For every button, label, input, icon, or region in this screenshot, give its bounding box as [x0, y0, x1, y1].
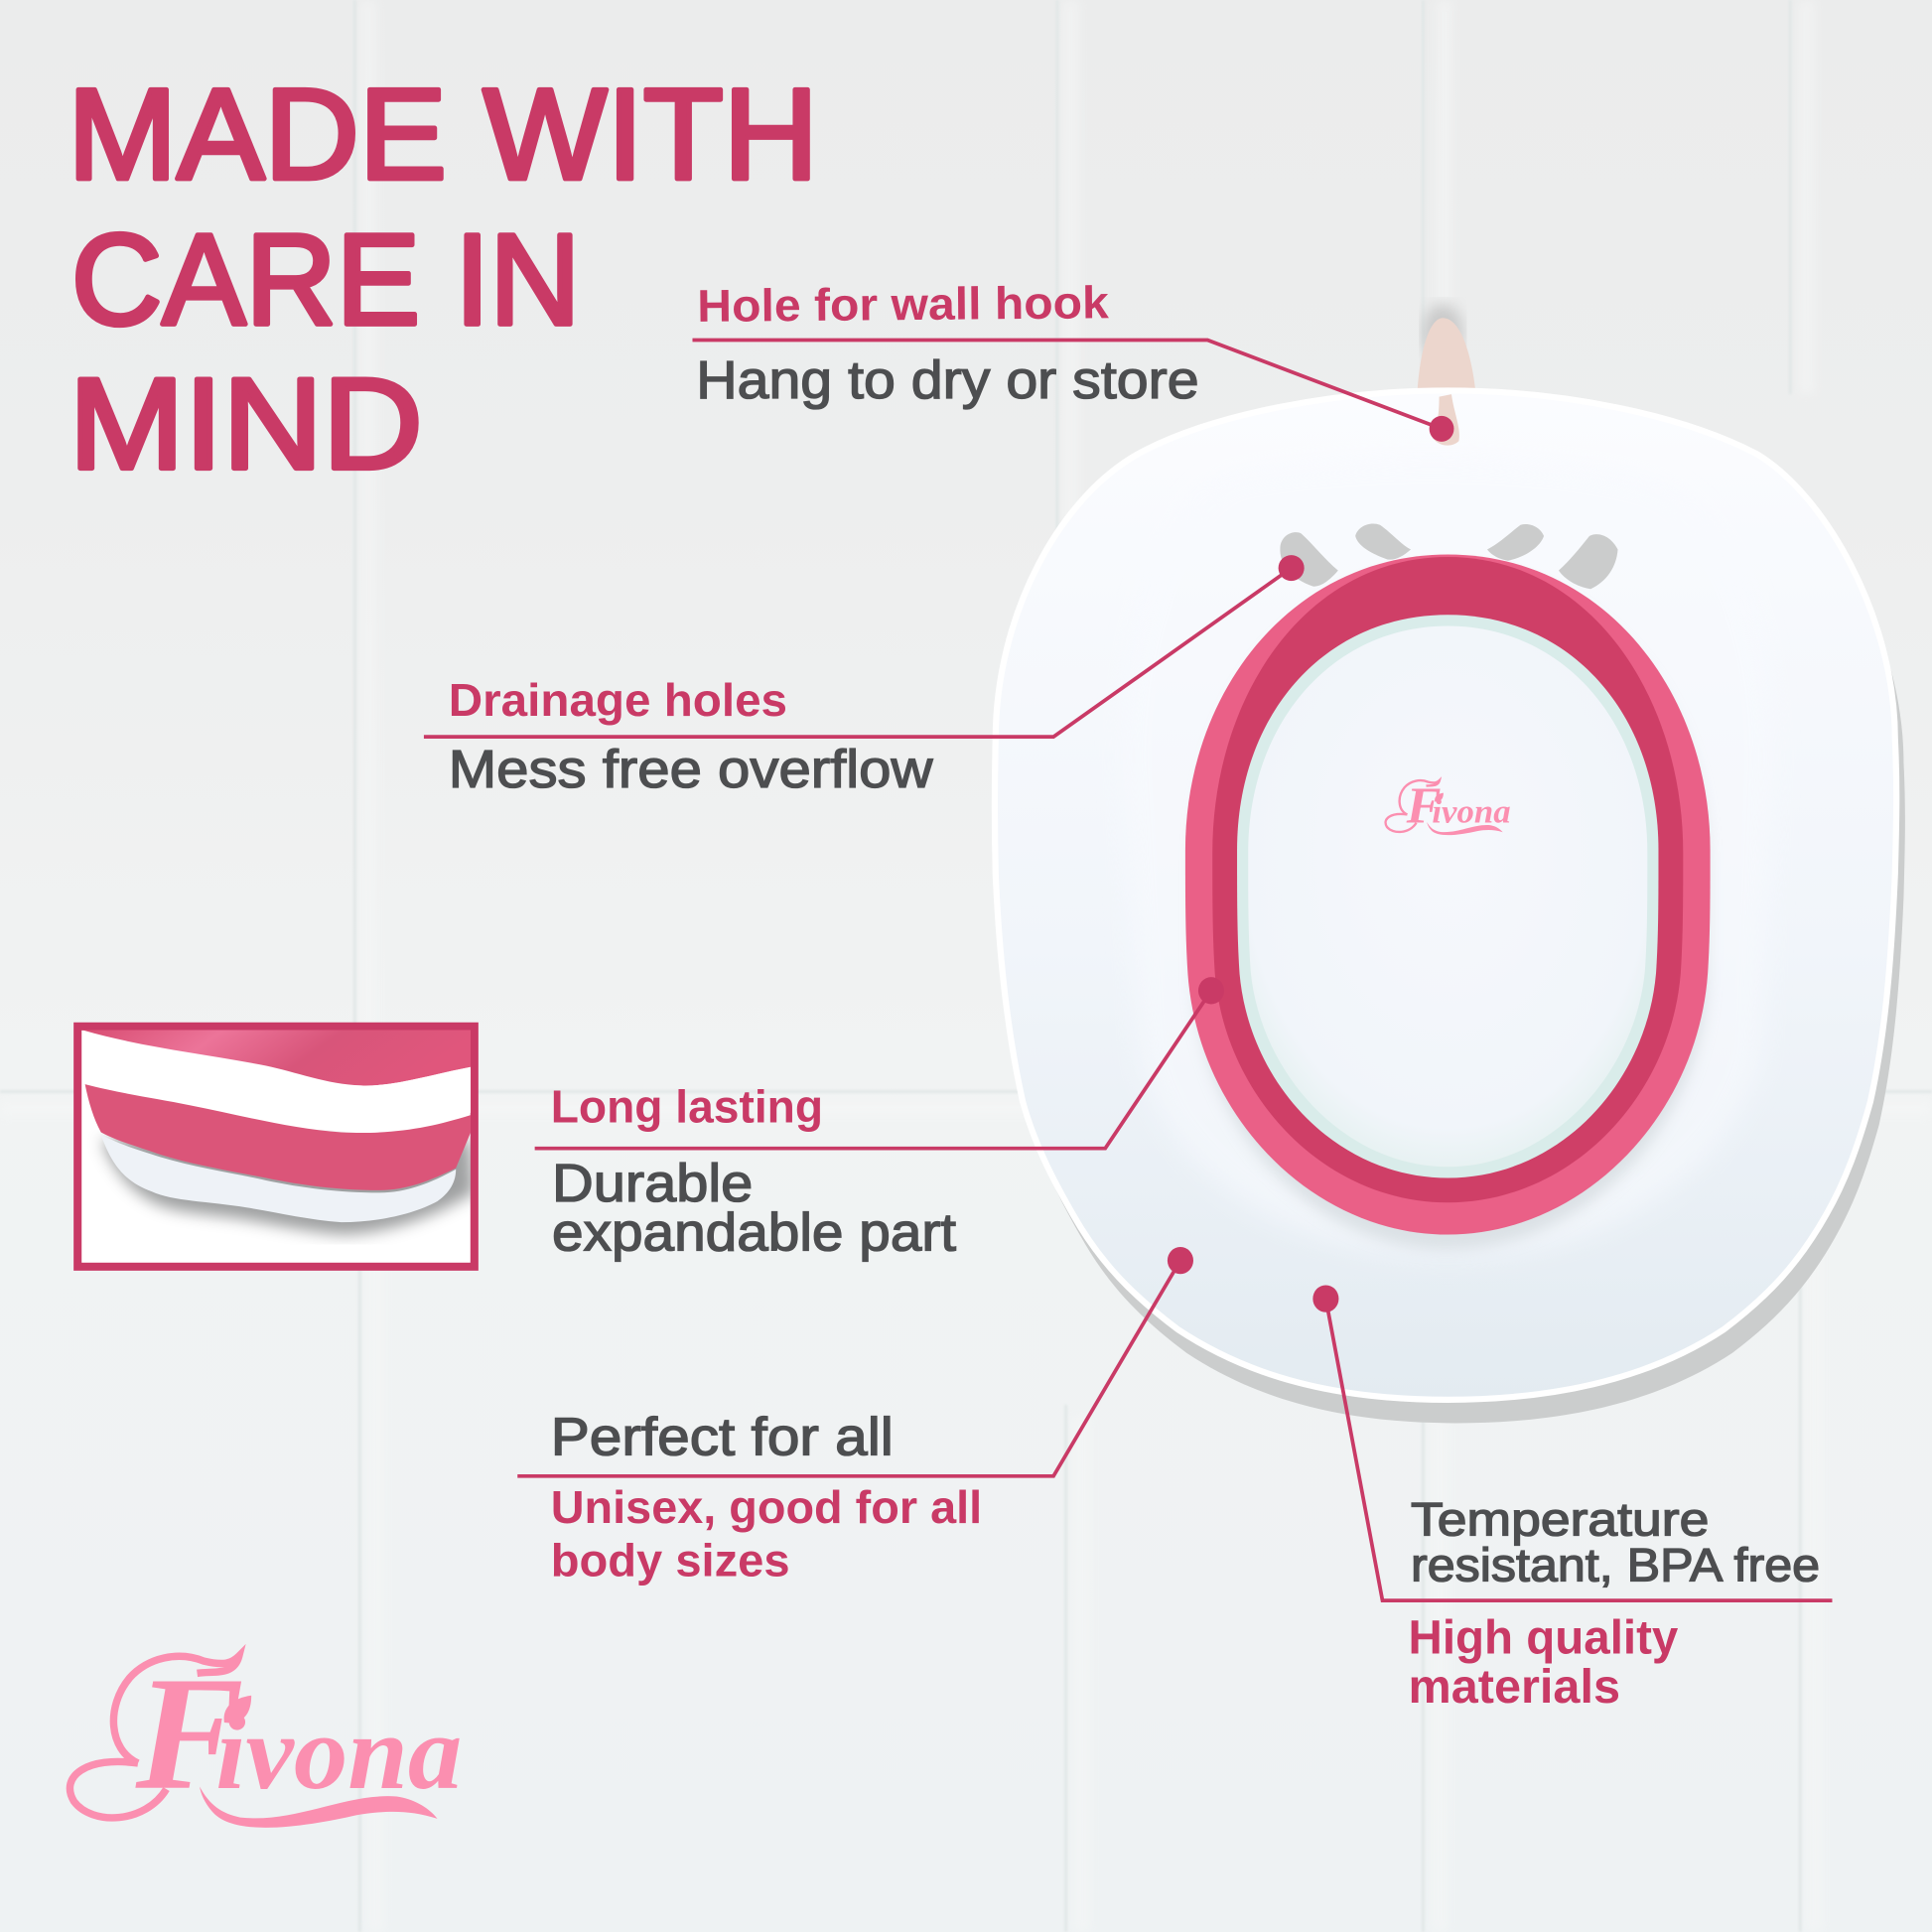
- callout: long lasting: Durable: [552, 1155, 753, 1213]
- callout: perfect for all: Perfect for all: [551, 1409, 894, 1467]
- callout: drainage holes: Mess free overflow: [449, 741, 933, 799]
- callout: long lasting: [535, 977, 1224, 1263]
- icon: wall hook: [1417, 303, 1476, 397]
- shell: white basin rim: [995, 390, 1896, 1400]
- callout: high quality materials: [1312, 1285, 1832, 1714]
- collapsible pink ring: [1185, 554, 1711, 1249]
- title: CARE IN: [71, 207, 581, 351]
- callout: hole for wall hook: Hang to dry or store: [696, 351, 1199, 410]
- shell shadow: [1004, 414, 1905, 1423]
- logo: Fivona: ivona: [215, 1695, 462, 1812]
- hook stem through hole: [1432, 394, 1459, 446]
- logo swashes: [69, 1656, 438, 1828]
- title: [68, 62, 818, 496]
- callout: hole for wall hook: [692, 276, 1453, 442]
- callout: perfect for all: [517, 1247, 1193, 1586]
- callout: perfect for all: Unisex, good for all: [551, 1481, 982, 1533]
- brand logo on basin: F: [1406, 776, 1442, 834]
- callout: drainage holes: [424, 555, 1305, 799]
- brand logo on basin: [1386, 776, 1511, 835]
- callout: long lasting: expandable part: [552, 1204, 956, 1263]
- callout: high quality materials: High quality: [1409, 1611, 1678, 1665]
- callout: hole for wall hook: Hole for wall hook: [697, 276, 1110, 332]
- logo: Fivona: [69, 1644, 462, 1828]
- product: sitz bath seen from above: [995, 303, 1905, 1423]
- callout: high quality materials: resistant, BPA free: [1411, 1538, 1820, 1590]
- callout: drainage holes: Drainage holes: [449, 674, 787, 726]
- brand logo on basin: ivona: [1432, 793, 1511, 830]
- inner basin: [1237, 615, 1658, 1177]
- title: MIND: [69, 351, 423, 496]
- logo: Fivona: F: [135, 1644, 244, 1824]
- callout: high quality materials: Temperature: [1411, 1492, 1709, 1545]
- callout: long lasting: Long lasting: [551, 1081, 823, 1133]
- panel: close-up of expandable part: [77, 1027, 475, 1267]
- drainage holes: [1280, 523, 1618, 589]
- title: MADE WITH: [68, 62, 818, 207]
- callout: perfect for all: body sizes: [551, 1534, 790, 1586]
- callout: high quality materials: materials: [1409, 1660, 1620, 1714]
